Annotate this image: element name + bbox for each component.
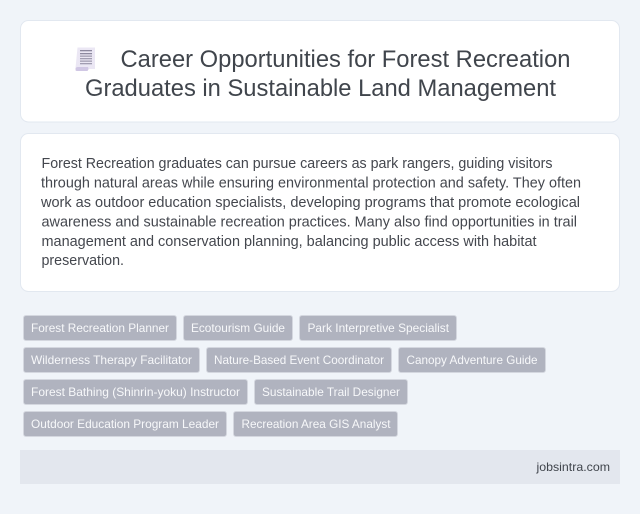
tag list: career roles <box>24 316 546 436</box>
title: Graduates in Sustainable Land Management <box>85 75 556 102</box>
tag: Forest Bathing (Shinrin-yoku) Instructor <box>31 385 240 399</box>
tag: Wilderness Therapy Facilitator <box>31 353 192 367</box>
tag: Forest Recreation Planner <box>31 321 169 335</box>
tag <box>300 316 456 340</box>
tag <box>206 348 392 372</box>
tag: Recreation Area GIS Analyst <box>242 417 391 431</box>
panel: description card <box>20 134 620 292</box>
tag <box>254 380 408 404</box>
text block: description: awareness and sustainable recreation practices. Many also find opportunities in trail <box>42 214 577 230</box>
text block: description: through natural areas while ensuring environmental protection and safety. They often <box>41 176 581 192</box>
text block: description: preservation. <box>42 253 124 269</box>
text block: description <box>40 156 581 269</box>
text block: description: Forest Recreation graduates can pursue careers as park rangers, guiding visitors <box>42 156 552 172</box>
tag: Park Interpretive Specialist <box>308 321 450 335</box>
tag <box>184 316 292 340</box>
title: Career Opportunities for Forest Recreation <box>120 46 570 73</box>
text block: description: work as outdoor education specialists, developing programs that promote ecological <box>40 195 580 211</box>
tag: Outdoor Education Program Leader <box>31 417 219 431</box>
footer bar <box>20 450 620 484</box>
title <box>85 46 570 102</box>
tag <box>24 412 226 436</box>
tag: Ecotourism Guide <box>191 321 285 335</box>
tag: Sustainable Trail Designer <box>262 385 400 399</box>
text block: description: management and conservation planning, balancing public access with habitat <box>42 234 536 250</box>
tag: Nature-Based Event Coordinator <box>214 353 384 367</box>
tag <box>398 348 546 372</box>
icon: document scroll <box>76 48 95 71</box>
tag <box>24 348 200 372</box>
tag <box>24 380 248 404</box>
tag: Canopy Adventure Guide <box>406 353 538 367</box>
footer text: source: jobsintra.com <box>535 460 610 474</box>
tag <box>234 412 398 436</box>
tag <box>24 316 176 340</box>
panel: title card <box>20 20 620 122</box>
